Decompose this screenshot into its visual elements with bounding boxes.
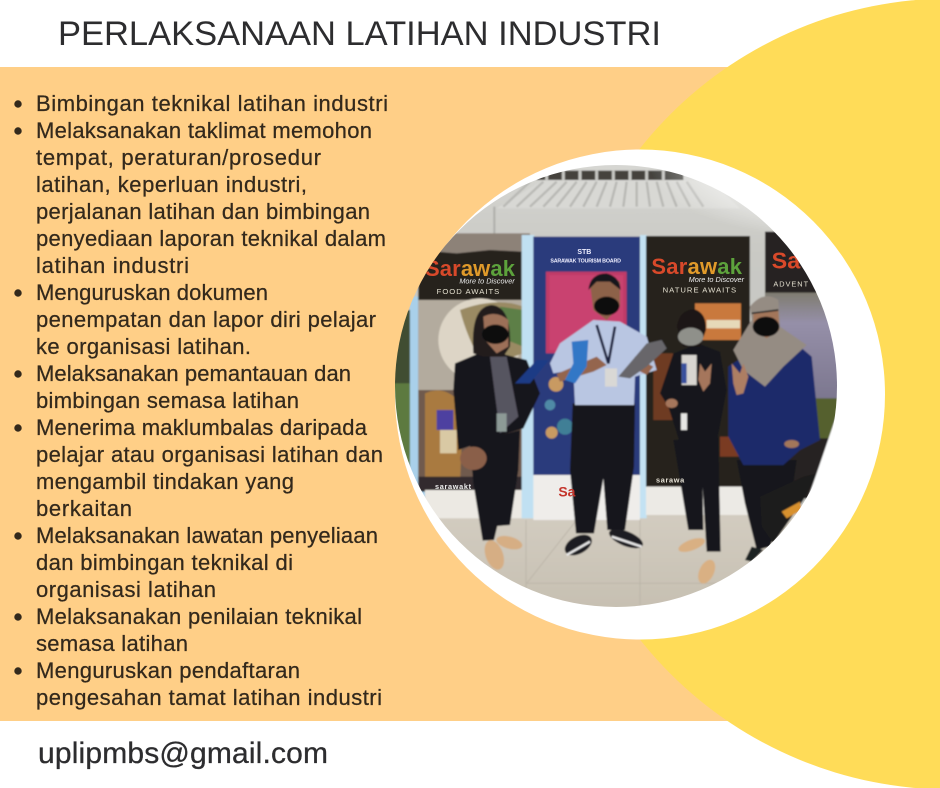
item: pemantauan: [14, 361, 351, 413]
person 1: [470, 430, 520, 541]
banner lettering in photo: STB: [577, 249, 591, 256]
item: taklimat: perjalanan latihan dan bimbingan: [36, 199, 370, 224]
item: lawatan penyeliaan: Melaksanakan lawatan penyeliaan: [36, 523, 378, 548]
item: dokumen penempatan: [14, 280, 376, 359]
item: maklumbalas: pelajar atau organisasi latihan dan: [36, 442, 383, 467]
banner lettering in photo: Sa: [772, 247, 801, 273]
bullet list: [14, 91, 388, 710]
banner 4: [764, 230, 829, 500]
title: PERLAKSANAAN LATIHAN INDUSTRI: [58, 15, 661, 53]
item: penilaian teknikal: [14, 604, 362, 656]
banner lettering in photo: sarawa: [656, 475, 685, 484]
item: bimbingan teknikal: Bimbingan teknikal latihan industri: [36, 91, 388, 116]
person 2: [570, 403, 635, 533]
item: lawatan penyeliaan: organisasi latihan: [36, 577, 216, 602]
item: taklimat: latihan, keperluan industri,: [36, 172, 307, 197]
person 3: [673, 437, 721, 552]
banner lettering in photo: More to Discover: [689, 275, 745, 284]
item: maklumbalas: Menerima maklumbalas daripada: [36, 415, 368, 440]
banner 1: [440, 232, 530, 254]
banner lettering in photo: [425, 247, 809, 500]
item: dokumen penempatan: Menguruskan dokumen: [36, 280, 268, 305]
photo: team in front of Sarawak banners: [390, 163, 857, 617]
person 4: [737, 460, 797, 550]
item: taklimat: latihan industri: [36, 253, 189, 278]
item: penilaian teknikal: semasa latihan: [36, 631, 188, 656]
item: taklimat: Melaksanakan taklimat memohon: [36, 118, 372, 143]
item: penilaian teknikal: Melaksanakan penilaian teknikal: [36, 604, 362, 629]
yellow background circle: [554, 0, 940, 788]
item: taklimat: penyediaan laporan teknikal dalam: [36, 226, 386, 251]
item: lawatan penyeliaan: dan bimbingan teknikal di: [36, 550, 293, 575]
banner lettering in photo: NATURE AWAITS: [663, 286, 737, 295]
banner lettering in photo: sarawakt: [435, 482, 472, 491]
item: maklumbalas: berkaitan: [36, 496, 132, 521]
item: pemantauan: bimbingan semasa latihan: [36, 388, 299, 413]
white photo ring: [395, 150, 885, 640]
item: maklumbalas: mengambil tindakan yang: [36, 469, 294, 494]
item: pendaftaran: Menguruskan pendaftaran: [36, 658, 300, 683]
banner lettering in photo: SARAWAK TOURISM BOARD: [550, 258, 621, 264]
banner lettering in photo: More to Discover: [459, 276, 515, 285]
item: lawatan penyeliaan: [14, 523, 378, 602]
banner 3: [646, 236, 750, 487]
banner lettering in photo: Sarawak: [651, 254, 743, 279]
banner lettering in photo: FOOD AWAITS: [437, 287, 500, 296]
item: dokumen penempatan: ke organisasi latihan.: [36, 334, 251, 359]
banner lettering in photo: Sarawak: [425, 256, 516, 281]
item: taklimat: [14, 118, 386, 278]
item: maklumbalas: [14, 415, 383, 521]
banner lettering in photo: ADVENT: [773, 280, 809, 289]
banner 2: [522, 235, 534, 518]
banner lettering in photo: Sa: [558, 484, 576, 500]
item: pendaftaran: pengesahan tamat latihan industri: [36, 685, 382, 710]
item: pendaftaran: [14, 658, 382, 710]
item: taklimat: tempat, peraturan/prosedur: [36, 145, 321, 170]
contact email: uplipmbs@gmail.com: [38, 737, 328, 770]
item: dokumen penempatan: penempatan dan lapor diri pelajar: [36, 307, 376, 332]
item: pemantauan: Melaksanakan pemantauan dan: [36, 361, 351, 386]
